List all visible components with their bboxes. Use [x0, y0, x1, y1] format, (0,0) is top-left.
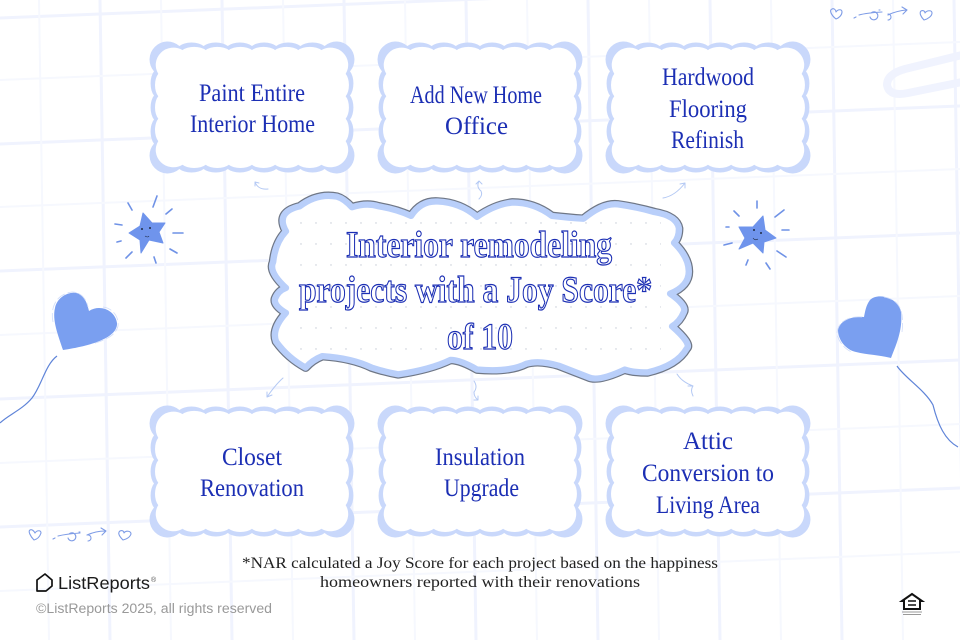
card: Hardwood Flooring Refinish: Flooring — [669, 96, 747, 123]
right heart balloon — [837, 296, 958, 447]
card: Paint Entire Interior Home: Paint Entire — [199, 80, 305, 107]
card: Insulation Upgrade: Upgrade — [444, 475, 519, 502]
card: Add New Home Office: Add New Home — [410, 82, 542, 109]
card: Closet Renovation: Renovation — [200, 475, 304, 502]
title text: Interior remodeling — [346, 225, 612, 266]
card: Hardwood Flooring Refinish: Hardwood — [662, 64, 754, 91]
card: Insulation Upgrade: Insulation — [435, 444, 525, 471]
card: Attic Conversion to Living Area: Conversion to — [642, 460, 774, 487]
card: Add New Home Office: Office — [445, 113, 508, 140]
left heart balloon — [0, 292, 118, 423]
footnote: *NAR calculated a Joy Score for each project based on the happiness — [242, 555, 718, 572]
copyright: ©ListReports 2025, all rights reserved — [36, 601, 272, 616]
doodle: hearts and arrow, bottom left — [29, 528, 131, 541]
footnote: homeowners reported with their renovations — [320, 574, 640, 591]
card: Hardwood Flooring Refinish: Refinish — [671, 127, 744, 154]
title text: of 10 — [447, 317, 513, 358]
central title cloud — [272, 196, 689, 379]
card: Paint Entire Interior Home — [150, 42, 354, 173]
card: Add New Home Office — [378, 42, 582, 173]
equal housing icon — [902, 594, 922, 614]
footnote — [242, 555, 718, 591]
card: Hardwood Flooring Refinish — [606, 42, 810, 173]
small arrows linking cards to the title — [255, 181, 693, 400]
title text — [299, 225, 652, 358]
doodle: hearts and arrow, top right — [831, 7, 932, 20]
title text: projects with a Joy Score* — [299, 270, 652, 311]
card: Attic Conversion to Living Area: Living Area — [656, 492, 760, 519]
ListReports logo: ListReports — [58, 573, 150, 593]
paperclip decoration — [887, 55, 960, 94]
card: Closet Renovation: Closet — [222, 444, 282, 471]
card: Paint Entire Interior Home: Interior Home — [190, 111, 315, 138]
right star with rays — [724, 201, 789, 269]
ListReports logo: ® — [151, 576, 157, 584]
card: Insulation Upgrade — [378, 406, 582, 537]
card: Attic Conversion to Living Area: Attic — [683, 428, 733, 455]
card: Attic Conversion to Living Area — [606, 406, 810, 537]
left star with rays — [115, 196, 183, 263]
card: Closet Renovation — [150, 406, 354, 537]
